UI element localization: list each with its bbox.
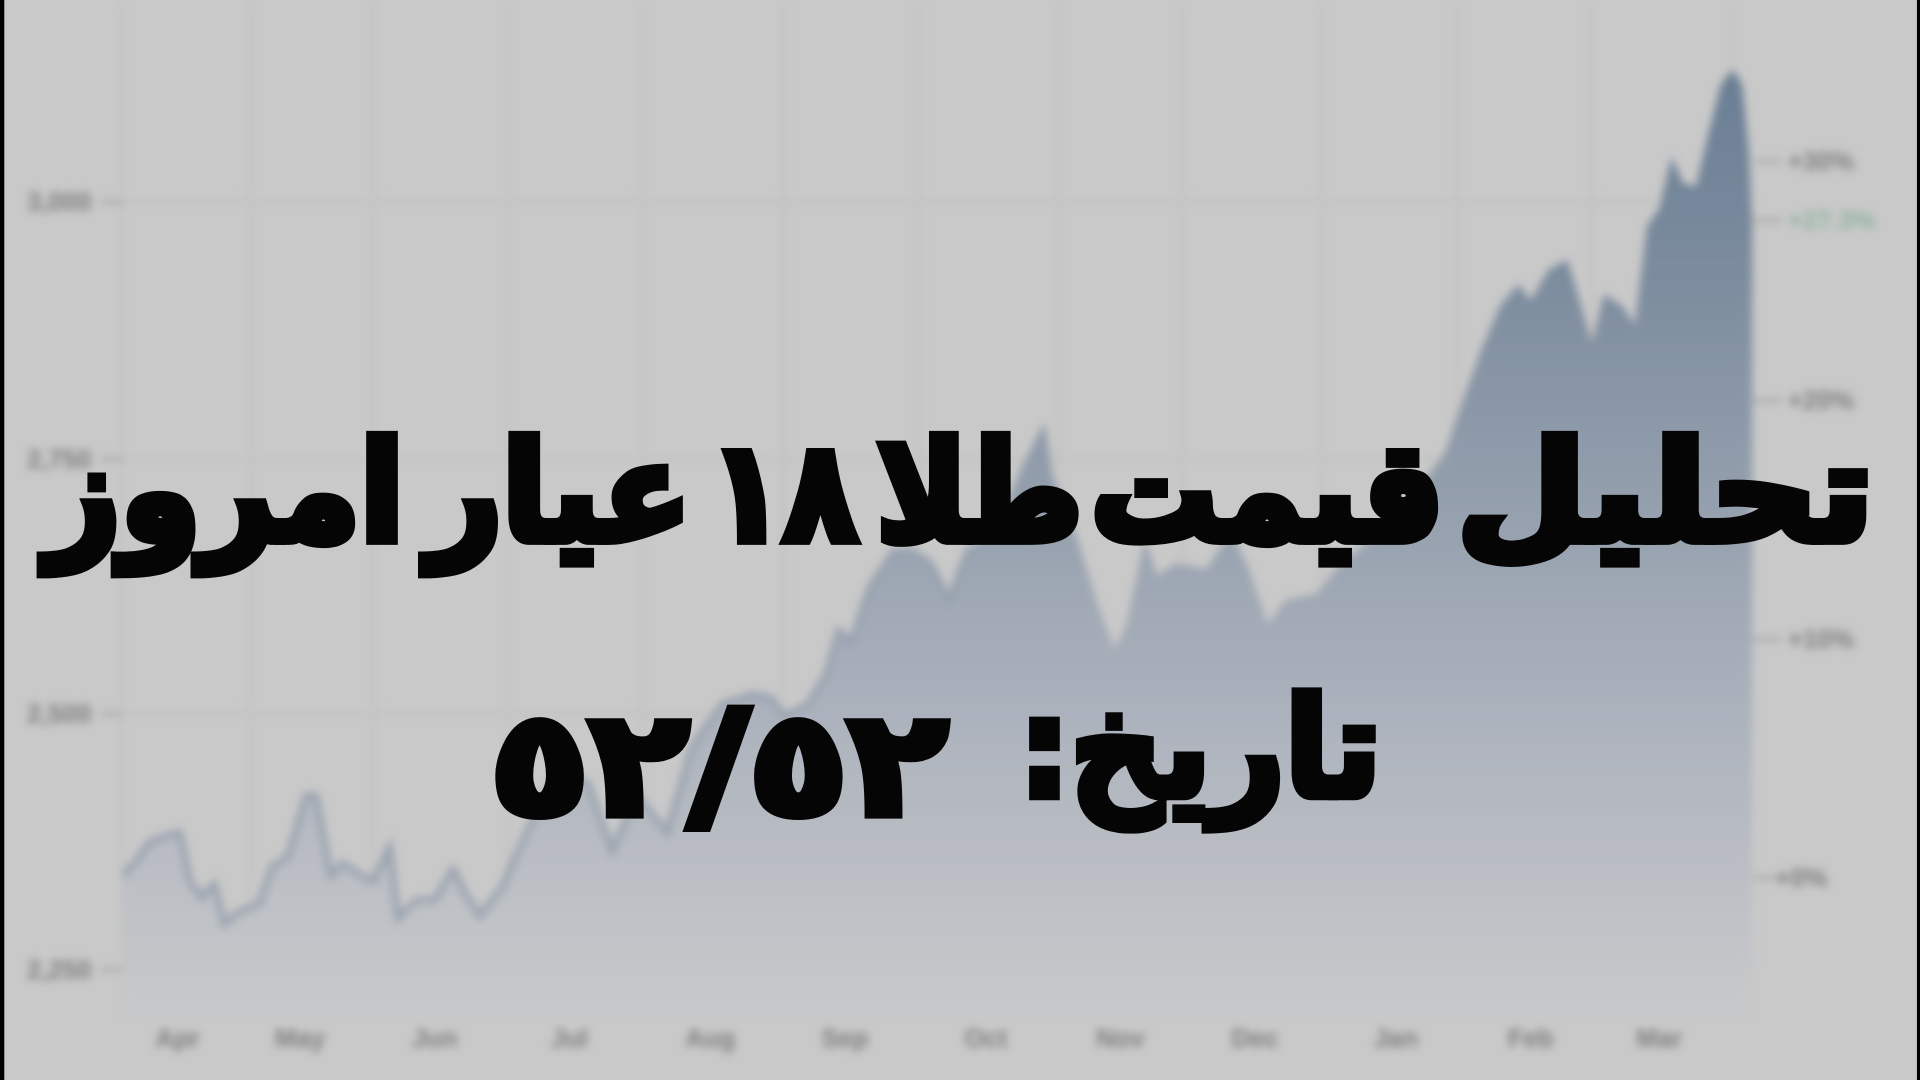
month axis: Dec (1232, 1025, 1279, 1053)
month axis: Aug (685, 1025, 735, 1053)
title (41, 414, 1873, 574)
month axis: Jul (551, 1025, 588, 1053)
month axis: Nov (1096, 1025, 1145, 1053)
month axis: Feb (1508, 1025, 1553, 1053)
title: ۱۸ (710, 414, 857, 573)
title: تحلیل (1457, 414, 1873, 573)
left price axis: 2,750 (27, 446, 91, 474)
title: امروز (41, 414, 404, 574)
right percent axis: +30% (1788, 148, 1854, 176)
month axis: Sep (821, 1025, 868, 1053)
left price axis (27, 189, 122, 984)
month axis: Jan (1374, 1025, 1418, 1053)
date line (490, 670, 1381, 849)
right percent axis: +20% (1788, 387, 1854, 415)
left letterbox bar (0, 0, 4, 1080)
right percent axis: +27.3% (1788, 207, 1876, 235)
title: عیار (422, 414, 691, 573)
title: طلا (877, 414, 1082, 573)
month axis: Jun (412, 1025, 458, 1053)
month axis: Mar (1636, 1025, 1682, 1053)
date line: تاریخ: (1019, 670, 1381, 830)
left price axis: 2,250 (27, 956, 91, 984)
month axis: Oct (964, 1025, 1008, 1053)
price line (122, 539, 992, 924)
date line: ٥٢/٥٢ (490, 681, 948, 849)
right percent axis: +0% (1776, 865, 1828, 893)
month axis (155, 1025, 1682, 1053)
title: قیمت (1091, 414, 1444, 573)
left price axis: 3,000 (27, 189, 91, 217)
month axis: Apr (155, 1025, 200, 1053)
right percent axis (1753, 148, 1876, 893)
left price axis: 2,500 (27, 700, 91, 728)
right percent axis: +10% (1788, 626, 1854, 654)
month axis: May (275, 1025, 326, 1053)
right letterbox bar (1917, 0, 1920, 1080)
area series (122, 69, 1752, 1016)
